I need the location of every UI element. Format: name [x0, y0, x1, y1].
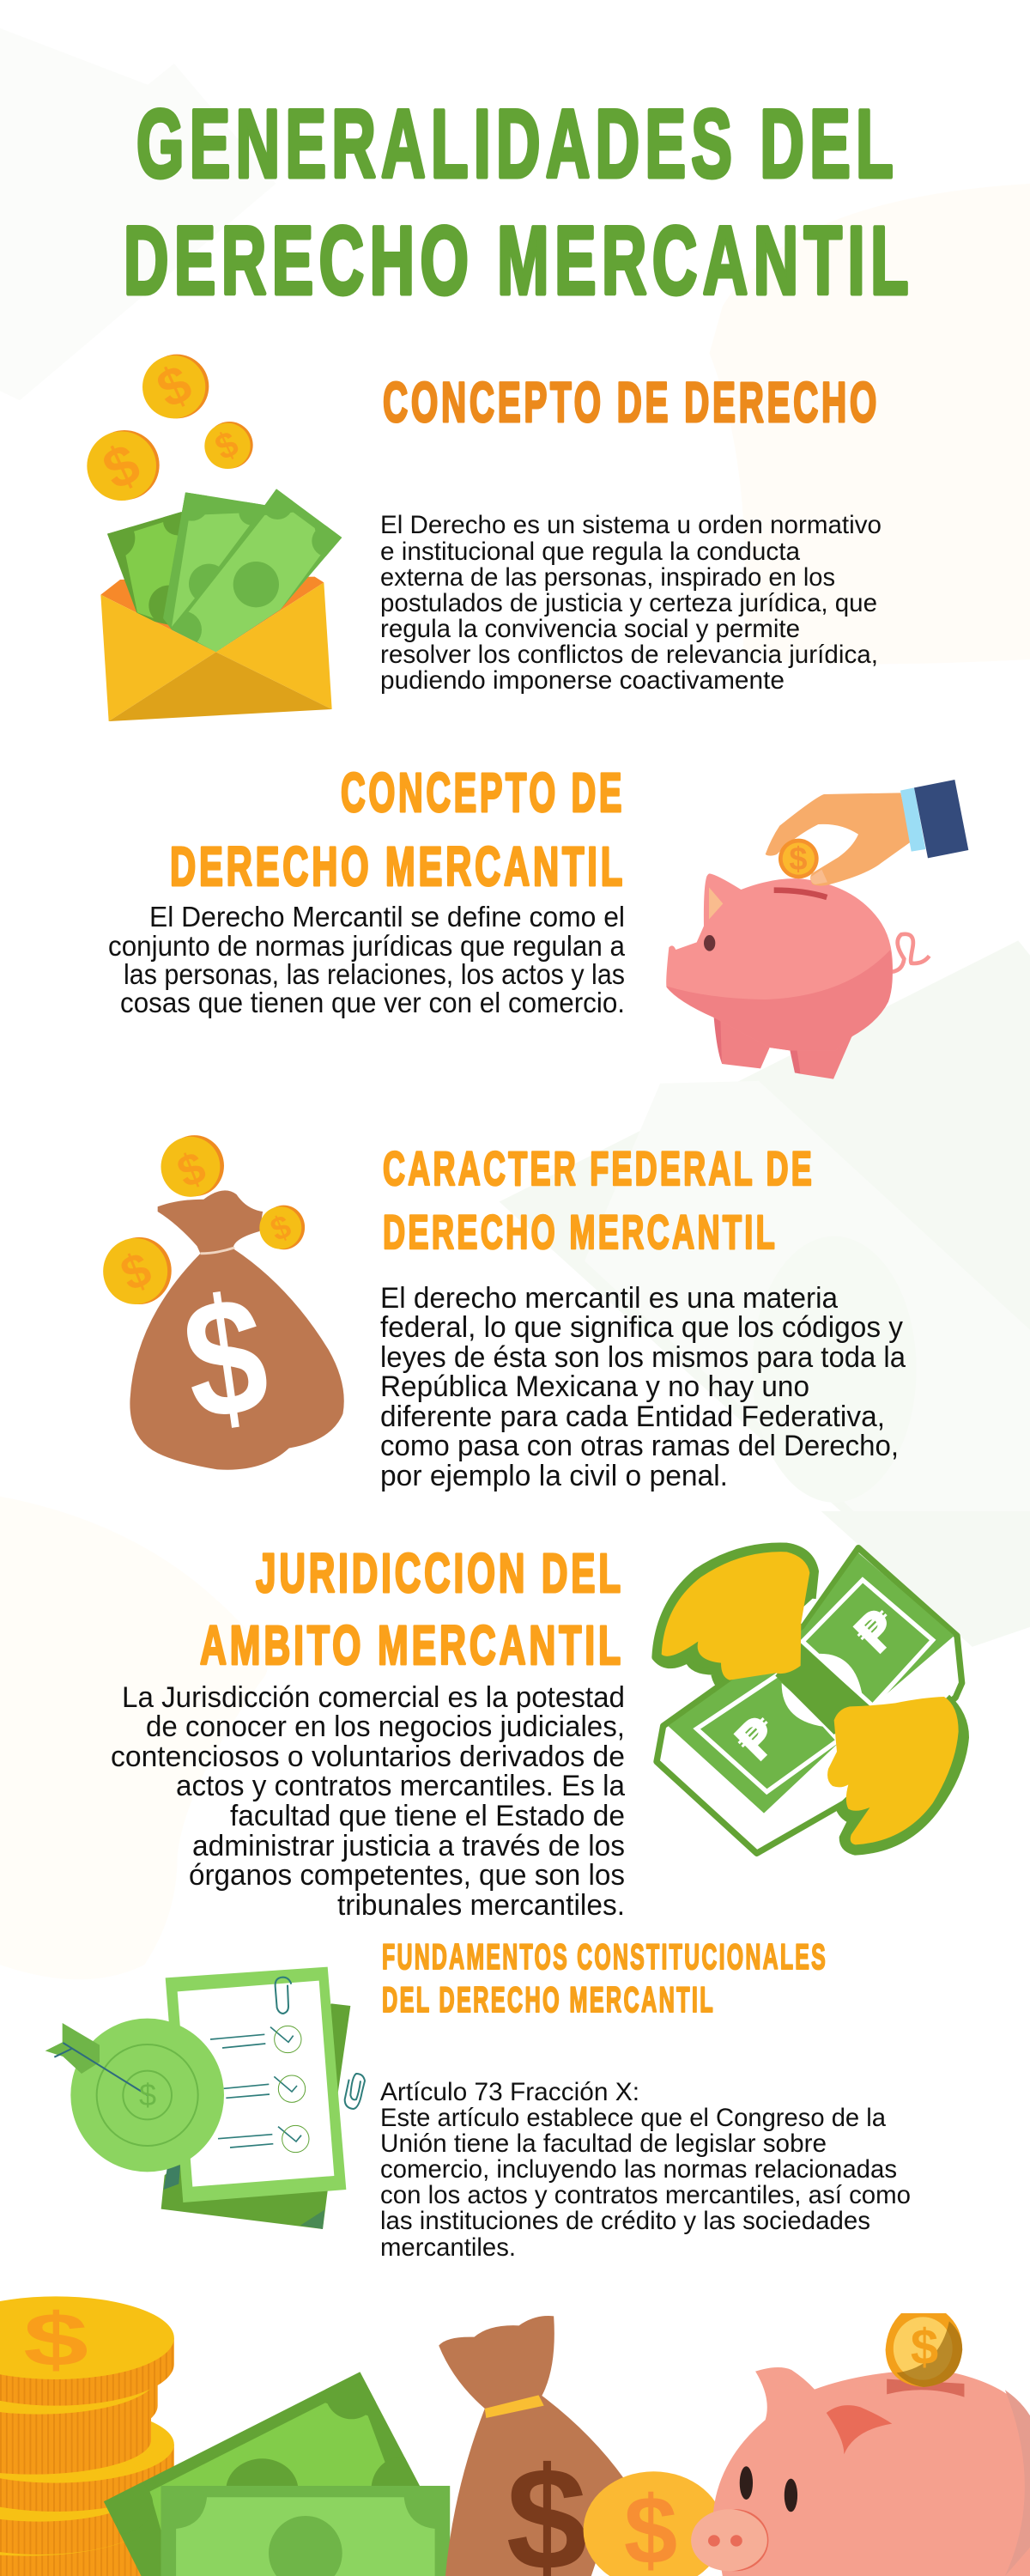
text block: diferente para cada Entidad Federativa, [380, 1400, 885, 1433]
heading [382, 1936, 827, 2020]
text block: federal, lo que significa que los códigos y [380, 1311, 903, 1344]
heading [170, 762, 626, 897]
text block: regula la convivencia social y permite [380, 615, 800, 643]
icon: money bag with coins: $ [266, 1208, 296, 1249]
text block: con los actos y contratos mercantiles, así como [380, 2181, 911, 2209]
text block: actos y contratos mercantiles. Es la [176, 1770, 625, 1802]
text block: Artículo 73 Fracción X: [380, 2078, 639, 2106]
heading: AMBITO MERCANTIL [200, 1614, 624, 1676]
icon: piggy bank with hand and coin [666, 780, 968, 1079]
text block [380, 2078, 911, 2262]
text block: las personas, las relaciones, los actos y las [124, 958, 625, 990]
text block: contenciosos o voluntarios derivados de [111, 1741, 625, 1773]
icon: piggy bank with hand and coin: $ [789, 841, 808, 878]
text block: cosas que tienen que ver con el comercio. [120, 987, 625, 1018]
text block [111, 1681, 625, 1922]
text block: Unión tiene la facultad de legislar sobre [380, 2129, 827, 2158]
icon: pig [691, 2313, 1030, 2576]
text block: e institucional que regula la conducta [380, 538, 800, 566]
text block: facultad que tiene el Estado de [230, 1800, 625, 1832]
text block: órganos competentes, que son los [189, 1859, 625, 1892]
panel: jurisdiccion [111, 1542, 966, 1922]
panel: concepto de derecho [87, 354, 882, 721]
text block: conjunto de normas jurídicas que regulan a [108, 930, 626, 962]
text block: leyes de ésta son los mismos para toda la [380, 1341, 906, 1374]
text block: como pasa con otras ramas del Derecho, [380, 1430, 899, 1462]
text block: El Derecho es un sistema u orden normativo [380, 511, 882, 539]
text block [380, 511, 882, 695]
icon: pig: $ [911, 2319, 938, 2375]
text block: El derecho mercantil es una materia [380, 1282, 838, 1315]
text block: pudiendo imponerse coactivamente [380, 666, 785, 695]
icon: bills [104, 2372, 450, 2576]
panel: concepto de derecho mercantil [108, 762, 968, 1079]
heading: DERECHO MERCANTIL [170, 835, 626, 897]
icon: gold coin [584, 2471, 724, 2576]
bottom illustration: money, bag, coin and pig [0, 2296, 1030, 2576]
heading: JURIDICCION DEL [256, 1542, 624, 1604]
heading: CONCEPTO DE [341, 762, 625, 823]
icon: money bag with coins [103, 1135, 344, 1470]
icon: coin stack: $ [23, 2298, 88, 2382]
text block: comercio, incluyendo las normas relacionadas [380, 2155, 897, 2184]
text block: postulados de justicia y certeza jurídica, que [380, 589, 877, 617]
text block: por ejemplo la civil o penal. [380, 1460, 728, 1492]
icon: money bag with coins: $ [173, 1261, 277, 1456]
icon: winged money [655, 1546, 966, 1853]
heading [383, 1141, 815, 1259]
panel: fundamentos constitucionales [45, 1936, 911, 2262]
icon: money bag with coins: $ [171, 1142, 212, 1198]
text block: de conocer en los negocios judiciales, [146, 1710, 625, 1743]
text block: El Derecho Mercantil se define como el [149, 901, 625, 933]
text block: las instituciones de crédito y las sociedades [380, 2207, 870, 2235]
icon: money bag with coins: $ [113, 1241, 158, 1302]
icon: winged money: ₱ [723, 1703, 793, 1774]
text block: resolver los conflictos de relevancia jurídica, [380, 641, 878, 669]
icon: envelope with money and coins: $ [209, 422, 244, 468]
text block [108, 901, 626, 1018]
icon: coin stack [0, 2296, 174, 2576]
icon: target and checklist [45, 1967, 365, 2229]
icon: money bag [439, 2316, 624, 2576]
text block: República Mexicana y no hay uno [380, 1370, 809, 1403]
heading: DEL DERECHO MERCANTIL [382, 1979, 715, 2020]
icon: envelope with money and coins: $ [94, 431, 148, 501]
heading [200, 1542, 624, 1676]
title [124, 90, 914, 314]
text block: externa de las personas, inspirado en los [380, 563, 835, 592]
text block: Este artículo establece que el Congreso de la [380, 2104, 886, 2132]
heading: DERECHO MERCANTIL [383, 1205, 778, 1259]
background shapes [0, 28, 1030, 1979]
text block: administrar justicia a través de los [192, 1830, 625, 1862]
icon: envelope with money and coins: $ [148, 354, 200, 420]
icon: envelope with money and coins [87, 354, 343, 721]
text block [380, 1282, 906, 1492]
icon: target and checklist: $ [139, 2077, 156, 2112]
text block: tribunales mercantiles. [337, 1889, 625, 1922]
text block: La Jurisdicción comercial es la potestad [122, 1681, 625, 1714]
icon: winged money: ₱ [842, 1595, 912, 1667]
panel: caracter federal [103, 1135, 906, 1492]
text block: mercantiles. [380, 2233, 516, 2262]
